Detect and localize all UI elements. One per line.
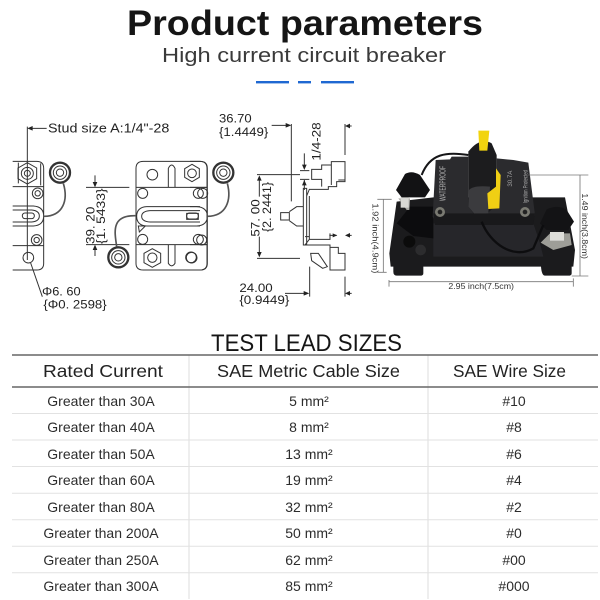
overall height guide marks (329, 124, 352, 297)
table row: 200A: #0 (506, 525, 522, 541)
dimension 24.00: {0.9449} (239, 293, 289, 307)
dimension 39.20: 39. 20 (83, 207, 97, 244)
table row: 80A: #2 (506, 499, 522, 515)
table row: 50A: Greater than 50A (47, 446, 155, 462)
dimension 36.70: 36.70 (219, 112, 252, 126)
table row: 300A: Greater than 300A (43, 578, 159, 594)
table row: 200A: Greater than 200A (43, 525, 159, 541)
product photo: circuit breaker (371, 131, 589, 291)
table row: 250A: Greater than 250A (43, 552, 159, 568)
product photo: circuit breaker: Ignition Protected (522, 170, 529, 203)
table header row: SAE Metric Cable Size (217, 361, 400, 381)
height dimension 1.92: 1.92 inch(4.9cm) (371, 203, 380, 274)
table row: 30A (47, 393, 526, 409)
technical drawing: right part of center view and side view (186, 112, 352, 307)
left terminal and boot (398, 198, 410, 210)
table row: 40A: Greater than 40A (47, 419, 155, 435)
table row: 300A (43, 578, 530, 594)
width dimension (389, 278, 573, 291)
table row: 60A: #4 (506, 472, 522, 488)
wires (422, 154, 468, 175)
dimension 1/4-28: 1/4-28 (309, 122, 323, 161)
table header row: SAE Wire Size (453, 361, 566, 381)
toggle handle (468, 141, 497, 214)
housing labels: WATERPROOF (438, 166, 447, 201)
table row: 50A: #6 (506, 446, 522, 462)
dimension 57.00: 57. 00 (248, 199, 262, 237)
right terminal and boot (541, 233, 572, 250)
table row: 60A: 19 mm² (285, 472, 333, 488)
table row: 30A: #10 (502, 393, 526, 409)
table row: 80A: Greater than 80A (47, 499, 155, 515)
table row: 60A: Greater than 60A (47, 472, 155, 488)
left breaker view (13, 161, 70, 297)
table row: 250A: 62 mm² (285, 552, 333, 568)
width dimension: 2.95 inch(7.5cm) (448, 282, 514, 291)
stud size label: Stud size A:1/4"-28 (48, 121, 169, 136)
table row: 40A (47, 419, 522, 435)
table row: 40A: #8 (506, 419, 522, 435)
table row: 50A: 13 mm² (285, 446, 333, 462)
subtitle: High current circuit breaker (162, 44, 446, 67)
table row: 80A (47, 499, 522, 515)
table header row: Rated Current (43, 361, 163, 381)
table row: 60A (47, 472, 522, 488)
dimension 24.00 (239, 267, 310, 307)
dimension 39.20 (83, 175, 129, 256)
dimension 36.70 (219, 112, 291, 201)
table row: 30A: Greater than 30A (47, 393, 155, 409)
table row: 250A: #00 (502, 552, 526, 568)
diameter label: {Φ0. 2598} (43, 297, 107, 311)
table row: 300A: #000 (498, 578, 530, 594)
housing (433, 157, 535, 223)
center breaker view (108, 161, 207, 270)
table row: 30A: 5 mm² (289, 393, 329, 409)
table row: 250A (43, 552, 526, 568)
diameter label (42, 284, 107, 311)
dimension 24.00: 24.00 (239, 281, 273, 295)
dimension 1/4-28 (300, 122, 323, 190)
title: Product parameters (127, 4, 483, 43)
product photo: circuit breaker: 30.7A (507, 170, 514, 187)
dimension 57.00 (248, 175, 300, 258)
dimension 39.20: {1. 5433} (94, 188, 108, 244)
dimension 57.00: {2. 2441} (260, 182, 274, 232)
decorative blue dashes (256, 81, 354, 83)
table heading: TEST LEAD SIZES (211, 330, 402, 357)
technical drawing: front views (13, 121, 207, 311)
diameter label: Φ6. 60 (42, 284, 81, 298)
table row: 200A: 50 mm² (285, 525, 333, 541)
screws (435, 207, 445, 217)
height dimension 1.49 (528, 175, 589, 276)
yellow tab (478, 131, 489, 151)
table header row (43, 361, 566, 381)
height dimension 1.92 (371, 199, 392, 274)
center view right edge and terminal (186, 161, 233, 270)
table: test lead sizes (12, 355, 598, 599)
table row: 200A (43, 525, 522, 541)
base (389, 197, 575, 276)
table row: 80A: 32 mm² (285, 499, 333, 515)
height dimension 1.49: 1.49 inch(3.8cm) (580, 193, 589, 259)
yellow indicator (487, 168, 501, 209)
table row: 300A: 85 mm² (285, 578, 333, 594)
table row: 40A: 8 mm² (289, 419, 329, 435)
table row: 50A (47, 446, 522, 462)
dimension 36.70: {1.4449} (219, 125, 268, 139)
side view of breaker (281, 162, 345, 270)
